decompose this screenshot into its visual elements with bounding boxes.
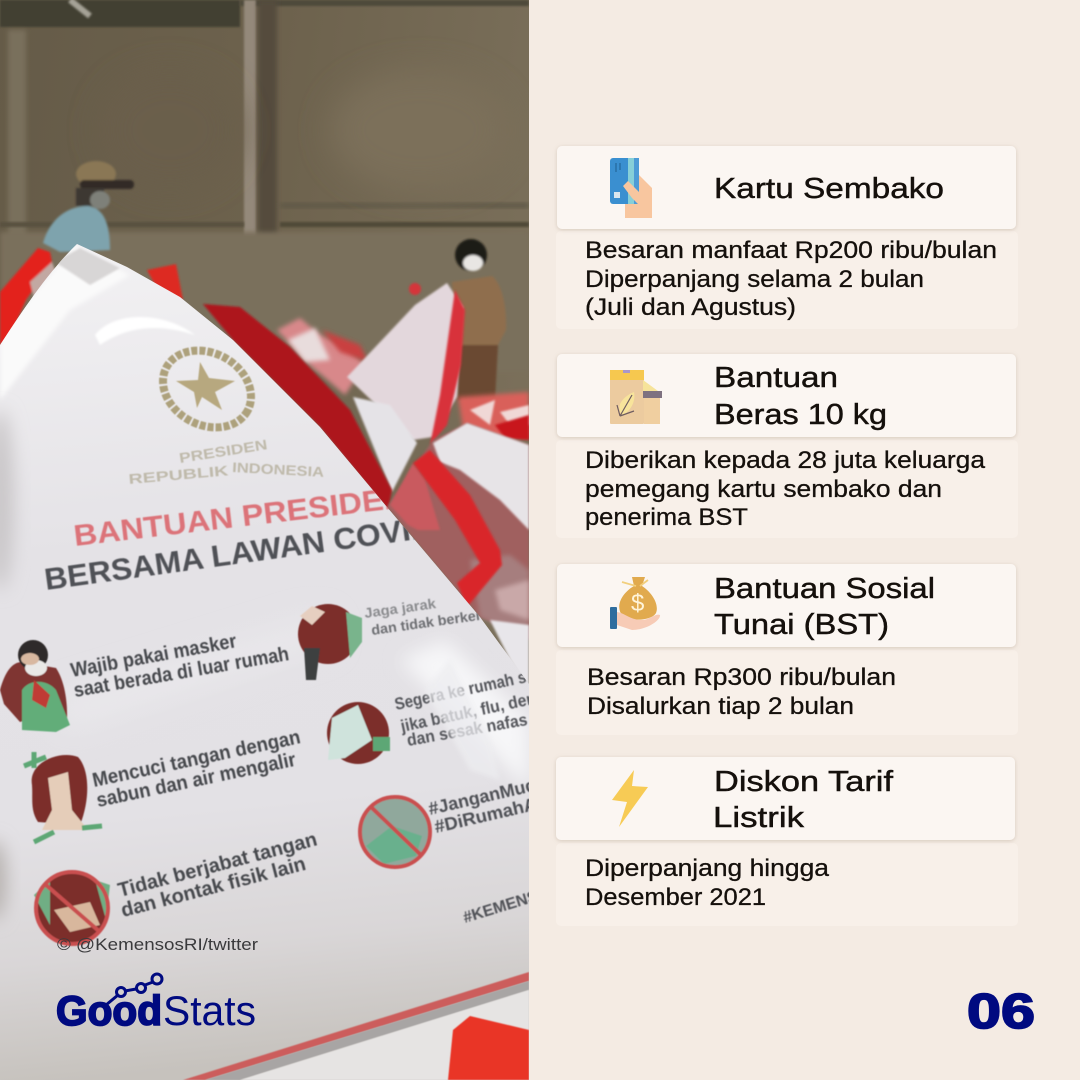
bag instruction: masker: Wajib pakai masker <box>69 630 238 682</box>
bag instruction: jabat tangan: dan kontak fisik lain <box>119 853 308 922</box>
logo chart line <box>106 974 162 1005</box>
shading and sheen <box>0 245 529 920</box>
bag instruction: jabat tangan <box>34 829 320 944</box>
text block <box>585 855 830 911</box>
bag instruction: jaga jarak <box>297 598 480 681</box>
photo: aid bag in warehouse <box>0 0 564 1080</box>
red straps top <box>0 248 183 352</box>
text block <box>585 237 997 321</box>
red bag at bottom <box>448 1016 529 1080</box>
logo wordmark: Good <box>56 987 162 1034</box>
body card <box>556 440 1018 538</box>
presidential emblem <box>158 346 256 432</box>
text block <box>585 447 986 531</box>
background red and white bags <box>203 283 529 510</box>
white aid bag <box>0 244 564 1080</box>
bag instruction: jaga jarak: Jaga jarak <box>363 595 437 621</box>
text block: (Juli dan Agustus) <box>585 294 796 321</box>
bag instruction: rumah sakit: dan sesak nafas <box>405 710 529 750</box>
header card <box>556 757 1015 840</box>
body card <box>556 231 1018 329</box>
heading: Listrik <box>713 802 805 834</box>
bag text: Presiden Republik Indonesia: PRESIDEN <box>178 436 268 466</box>
photo credit: © @KemensosRI/twitter <box>57 935 258 954</box>
icon: money bag on hand: $ <box>631 590 644 617</box>
bag text: Bantuan Presiden: BANTUAN PRESIDEN <box>72 481 409 553</box>
bag instruction: jangan mudik <box>357 782 529 870</box>
icon: money bag on hand <box>610 577 660 630</box>
bag bottom seam <box>183 972 529 1080</box>
text block: Diperpanjang selama 2 bulan <box>585 266 924 293</box>
body card <box>556 650 1018 735</box>
header card <box>557 146 1016 229</box>
header card <box>557 564 1016 647</box>
icon: card in hand <box>610 158 652 218</box>
GoodStats logo <box>56 974 256 1034</box>
heading <box>713 766 894 834</box>
text block: pemegang kartu sembako dan <box>585 476 942 503</box>
text block: Besaran Rp300 ribu/bulan <box>587 664 896 691</box>
bag text: Presiden Republik Indonesia: REPUBLIK <box>128 462 229 487</box>
bag instruction: cuci tangan: Mencuci tangan dengan <box>90 726 302 792</box>
warehouse wall <box>0 0 529 684</box>
background open bag <box>387 423 529 690</box>
heading <box>714 573 935 641</box>
bag instruction: rumah sakit: jika batuk, flu, demam <box>398 683 564 736</box>
heading: Beras 10 kg <box>714 399 887 431</box>
heading: Kartu Sembako <box>714 173 944 205</box>
background worker with mask <box>452 239 506 400</box>
text block: Diperpanjang hingga <box>585 855 830 882</box>
text block: Desember 2021 <box>585 884 766 911</box>
bag instruction: masker <box>0 630 291 732</box>
heading: Bantuan <box>714 362 838 394</box>
bag instruction: masker: saat berada di luar rumah <box>72 643 291 702</box>
text block: Diberikan kepada 28 juta keluarga <box>585 447 986 474</box>
text block: Besaran manfaat Rp200 ribu/bulan <box>585 237 997 264</box>
header card <box>557 354 1016 437</box>
bag instruction: jangan mudik: #DiRumahAja <box>432 790 555 837</box>
heading: Bantuan Sosial <box>714 573 935 605</box>
bag text: Bersama Lawan Covid: BERSAMA LAWAN COVID <box>42 509 435 597</box>
panel: Diskon Tarif Listrik <box>556 757 1018 926</box>
bag instruction: jaga jarak: dan tidak berkerumun <box>370 601 521 638</box>
GoodStats logo: Stats <box>163 987 256 1034</box>
background worker with hat <box>43 161 134 252</box>
body card <box>556 843 1018 926</box>
bag instruction: jangan mudik: #JanganMudik <box>426 771 554 819</box>
bag sheen over text <box>424 686 492 774</box>
panel: Kartu Sembako <box>556 146 1018 329</box>
heading <box>714 362 887 431</box>
icon: rice sack <box>610 370 662 424</box>
red bag strap right <box>413 450 502 607</box>
bag instruction: rumah sakit: Segera ke rumah sakit <box>393 662 554 714</box>
icon: lightning bolt <box>612 770 648 827</box>
page number: 06 <box>967 985 1035 1039</box>
heading: Diskon Tarif <box>714 766 894 798</box>
bag text: Presiden Republik Indonesia <box>129 439 324 484</box>
panel: Bantuan Sosial Tunai <box>556 564 1018 735</box>
bag instruction: cuci tangan <box>24 726 302 842</box>
text block: penerima BST <box>585 504 748 531</box>
heading: Tunai (BST) <box>714 609 889 641</box>
bag text: Presiden Republik Indonesia: INDONESIA <box>232 459 325 480</box>
bag instruction: cuci tangan: sabun dan air mengalir <box>95 749 298 812</box>
bag hashtag: #KEMENSOS <box>461 881 563 927</box>
text block: Disalurkan tiap 2 bulan <box>587 693 854 720</box>
bag instruction: jabat tangan: Tidak berjabat tangan <box>116 829 320 902</box>
bag instruction: rumah sakit <box>326 673 529 765</box>
panel: Bantuan Beras <box>556 354 1018 538</box>
text block <box>587 664 896 720</box>
